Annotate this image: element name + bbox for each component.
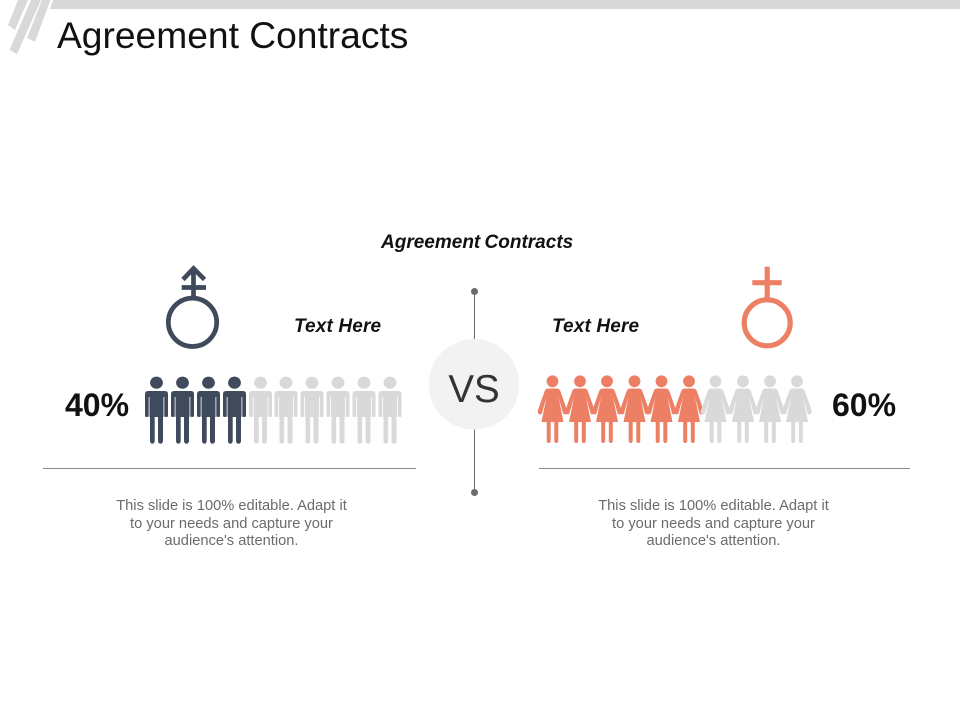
vs circle bbox=[429, 339, 519, 430]
right percentage: 60% bbox=[832, 387, 896, 423]
men pictogram row: 40% bbox=[145, 377, 402, 444]
vs text: VS bbox=[448, 368, 500, 411]
header decoration bbox=[8, 0, 960, 54]
right label: Text Here bbox=[552, 316, 639, 337]
title: Agreement Contracts bbox=[57, 14, 408, 56]
right description bbox=[598, 498, 829, 549]
left description bbox=[116, 498, 347, 549]
vertical connector with end dots bbox=[471, 288, 478, 496]
right description: audience's attention. bbox=[646, 533, 780, 549]
left description: to your needs and capture your bbox=[130, 516, 333, 532]
right description: This slide is 100% editable. Adapt it bbox=[598, 498, 829, 514]
left description: audience's attention. bbox=[164, 533, 298, 549]
icon: female symbol bbox=[744, 267, 790, 346]
left percentage: 40% bbox=[65, 387, 129, 423]
divider right bbox=[539, 468, 910, 470]
right description: to your needs and capture your bbox=[612, 516, 815, 532]
left description: This slide is 100% editable. Adapt it bbox=[116, 498, 347, 514]
left label: Text Here bbox=[294, 316, 381, 337]
subtitle: Agreement Contracts bbox=[381, 232, 573, 253]
divider left bbox=[43, 468, 416, 470]
icon: male symbol bbox=[168, 268, 217, 346]
women pictogram row: 60% bbox=[538, 375, 812, 443]
